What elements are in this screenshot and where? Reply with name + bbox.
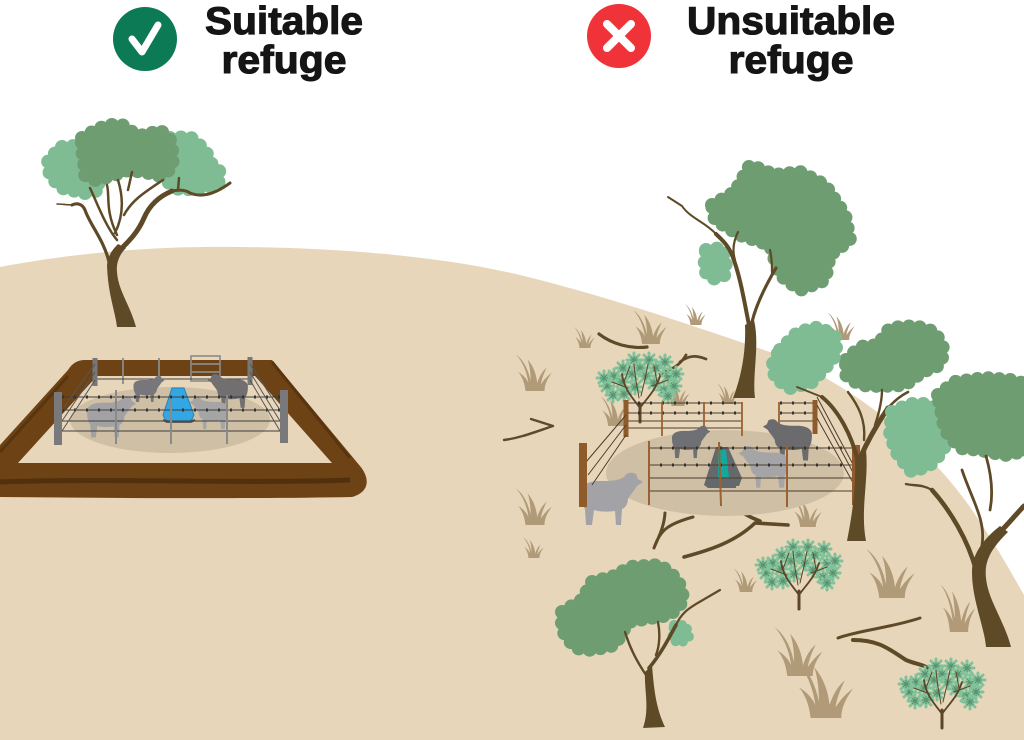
refuge enclosure: unsuitable [581,397,856,525]
back fence [626,400,815,437]
heading: suitable refuge [205,0,363,82]
tree: far right [890,378,1024,647]
trunk and branches [625,590,720,728]
canopy: light [773,327,836,388]
front fence [58,364,284,445]
tree: suitable refuge [48,125,230,327]
canopy: light [704,248,726,279]
moat: earth bank around suitable refuge [0,360,367,498]
bushes [597,353,985,728]
canopy: dark [712,165,850,290]
heading: suitable refuge: Suitable [205,0,363,43]
back fence with gate [95,356,251,386]
refuge enclosure: suitable [58,356,284,453]
sheep [87,374,248,438]
trunk and branches [668,197,776,398]
grass tufts [516,304,975,718]
shaded ground [70,387,270,453]
heading: unsuitable refuge: refuge [728,39,854,82]
front fence [583,397,856,507]
canopy: dark [562,565,684,650]
canopy: dark [82,125,173,180]
trunk and branches [797,387,908,541]
canopy: dark [938,378,1024,455]
heading: unsuitable refuge [687,0,895,82]
canopy: light left [48,145,100,193]
sheep [581,419,812,525]
icon: green check [113,7,177,71]
tree: bottom [562,565,720,728]
heading: unsuitable refuge: Unsuitable [687,0,895,43]
canopy: light right [165,137,220,190]
trunk and branches [906,456,1024,647]
heading: suitable refuge: refuge [222,39,346,82]
shaded ground [606,430,844,516]
tree: behind fence [668,165,850,398]
canopy: light [672,625,689,643]
canopy: light [890,404,945,472]
trunk and branches [57,172,230,327]
water trough [704,447,742,488]
tree: centre right [773,326,944,541]
fallen branches [504,334,928,668]
icon: red cross [587,4,651,68]
canopy: dark [846,326,944,386]
ground [0,247,1024,740]
water trough [163,388,195,422]
